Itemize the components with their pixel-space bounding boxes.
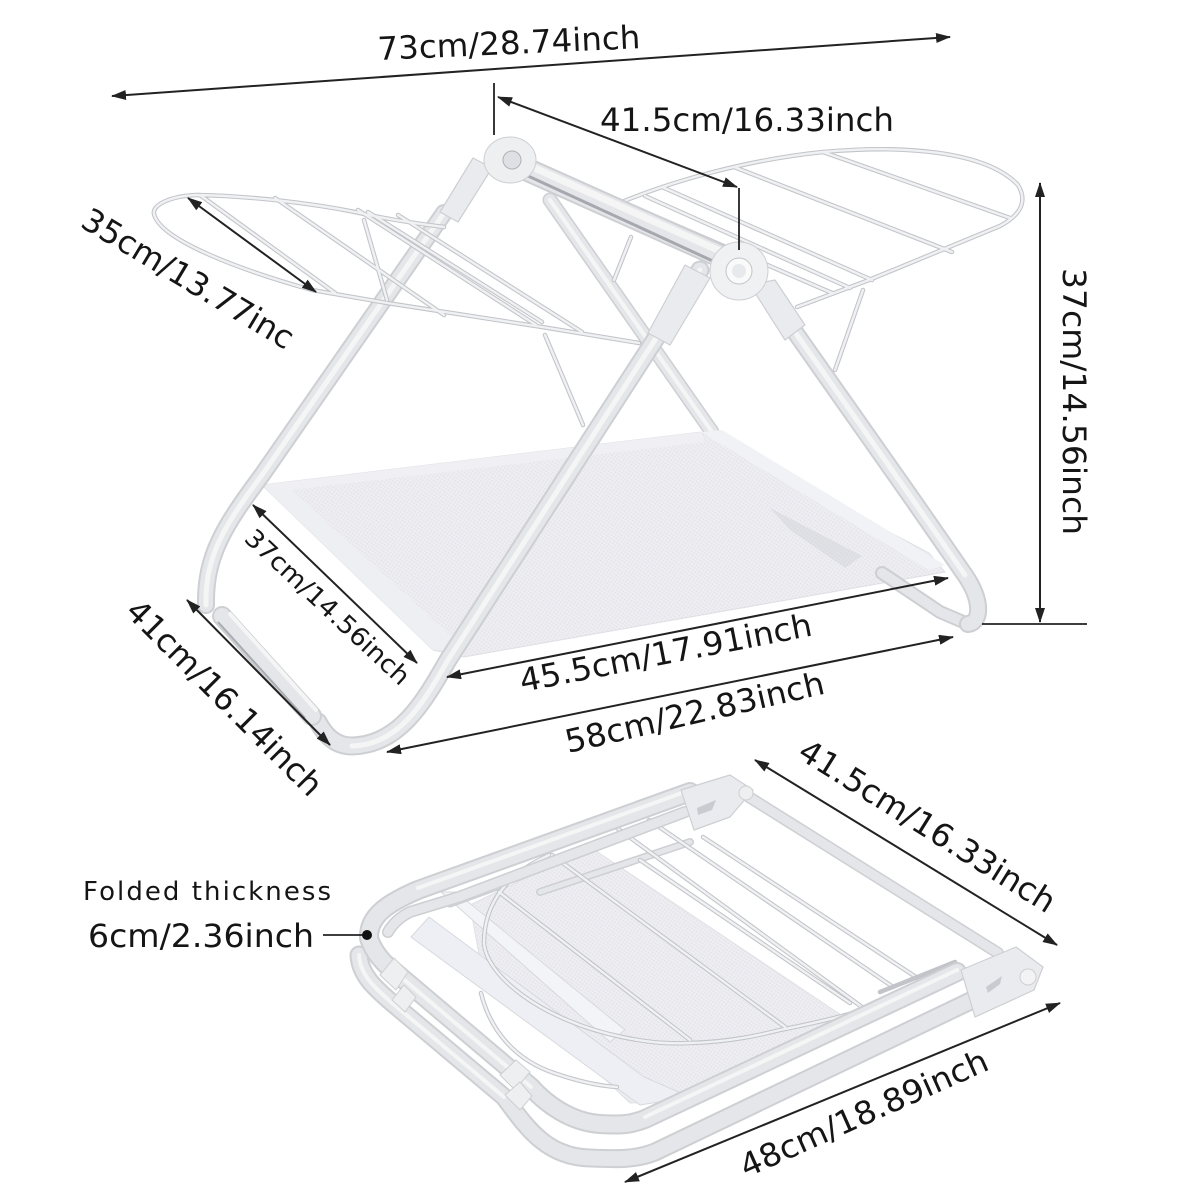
label: folded width: 48cm/18.89inch — [734, 1042, 994, 1185]
top hinge — [440, 137, 536, 222]
top cross bar — [510, 157, 720, 262]
label: folded thickness value: 6cm/2.36inch — [88, 917, 314, 955]
label: shelf depth: 37cm/14.56inch — [239, 523, 416, 691]
mesh shelf — [262, 430, 945, 657]
left leg — [206, 213, 444, 605]
bottom foot bar — [218, 614, 316, 718]
tube sleeves — [380, 958, 532, 1110]
rear tube — [359, 955, 985, 1159]
top hinge of folded frame — [681, 775, 753, 830]
front hinge and sleeves — [648, 242, 805, 345]
inner cross bars — [450, 842, 690, 903]
lower arc of wing — [481, 993, 617, 1087]
front frame tube — [369, 790, 957, 1124]
label: height: 37cm/14.56inch — [1055, 268, 1093, 535]
label: wing width: 35cm/13.77inc — [75, 200, 301, 357]
right back leg — [790, 325, 978, 624]
back leg behind shelf — [550, 200, 712, 432]
label: foot length: 41cm/16.14inch — [118, 592, 330, 804]
folded drying rack — [359, 775, 1043, 1159]
folded mesh panel — [411, 847, 844, 1105]
dimension lines — [112, 37, 1087, 1182]
label: shelf width: 45.5cm/17.91inch — [516, 606, 815, 700]
right hinge of folded frame — [961, 947, 1043, 1017]
label: folded depth: 41.5cm/16.33inch — [792, 732, 1063, 921]
left drying wing — [154, 195, 639, 425]
label: base width: 58cm/22.83inch — [561, 664, 828, 761]
unfolded drying rack — [154, 137, 1022, 746]
inner top tube — [388, 812, 685, 932]
right foot curve — [882, 573, 968, 624]
label: overall width: 73cm/28.74inch — [377, 18, 641, 68]
right drying wing — [614, 149, 1022, 370]
right side double bar — [749, 797, 998, 992]
front leg — [318, 270, 700, 746]
label: folded thickness title: Folded thickness — [83, 877, 331, 907]
folded rods and arc — [484, 820, 925, 1043]
label: top bar length: 41.5cm/16.33inch — [600, 101, 894, 139]
